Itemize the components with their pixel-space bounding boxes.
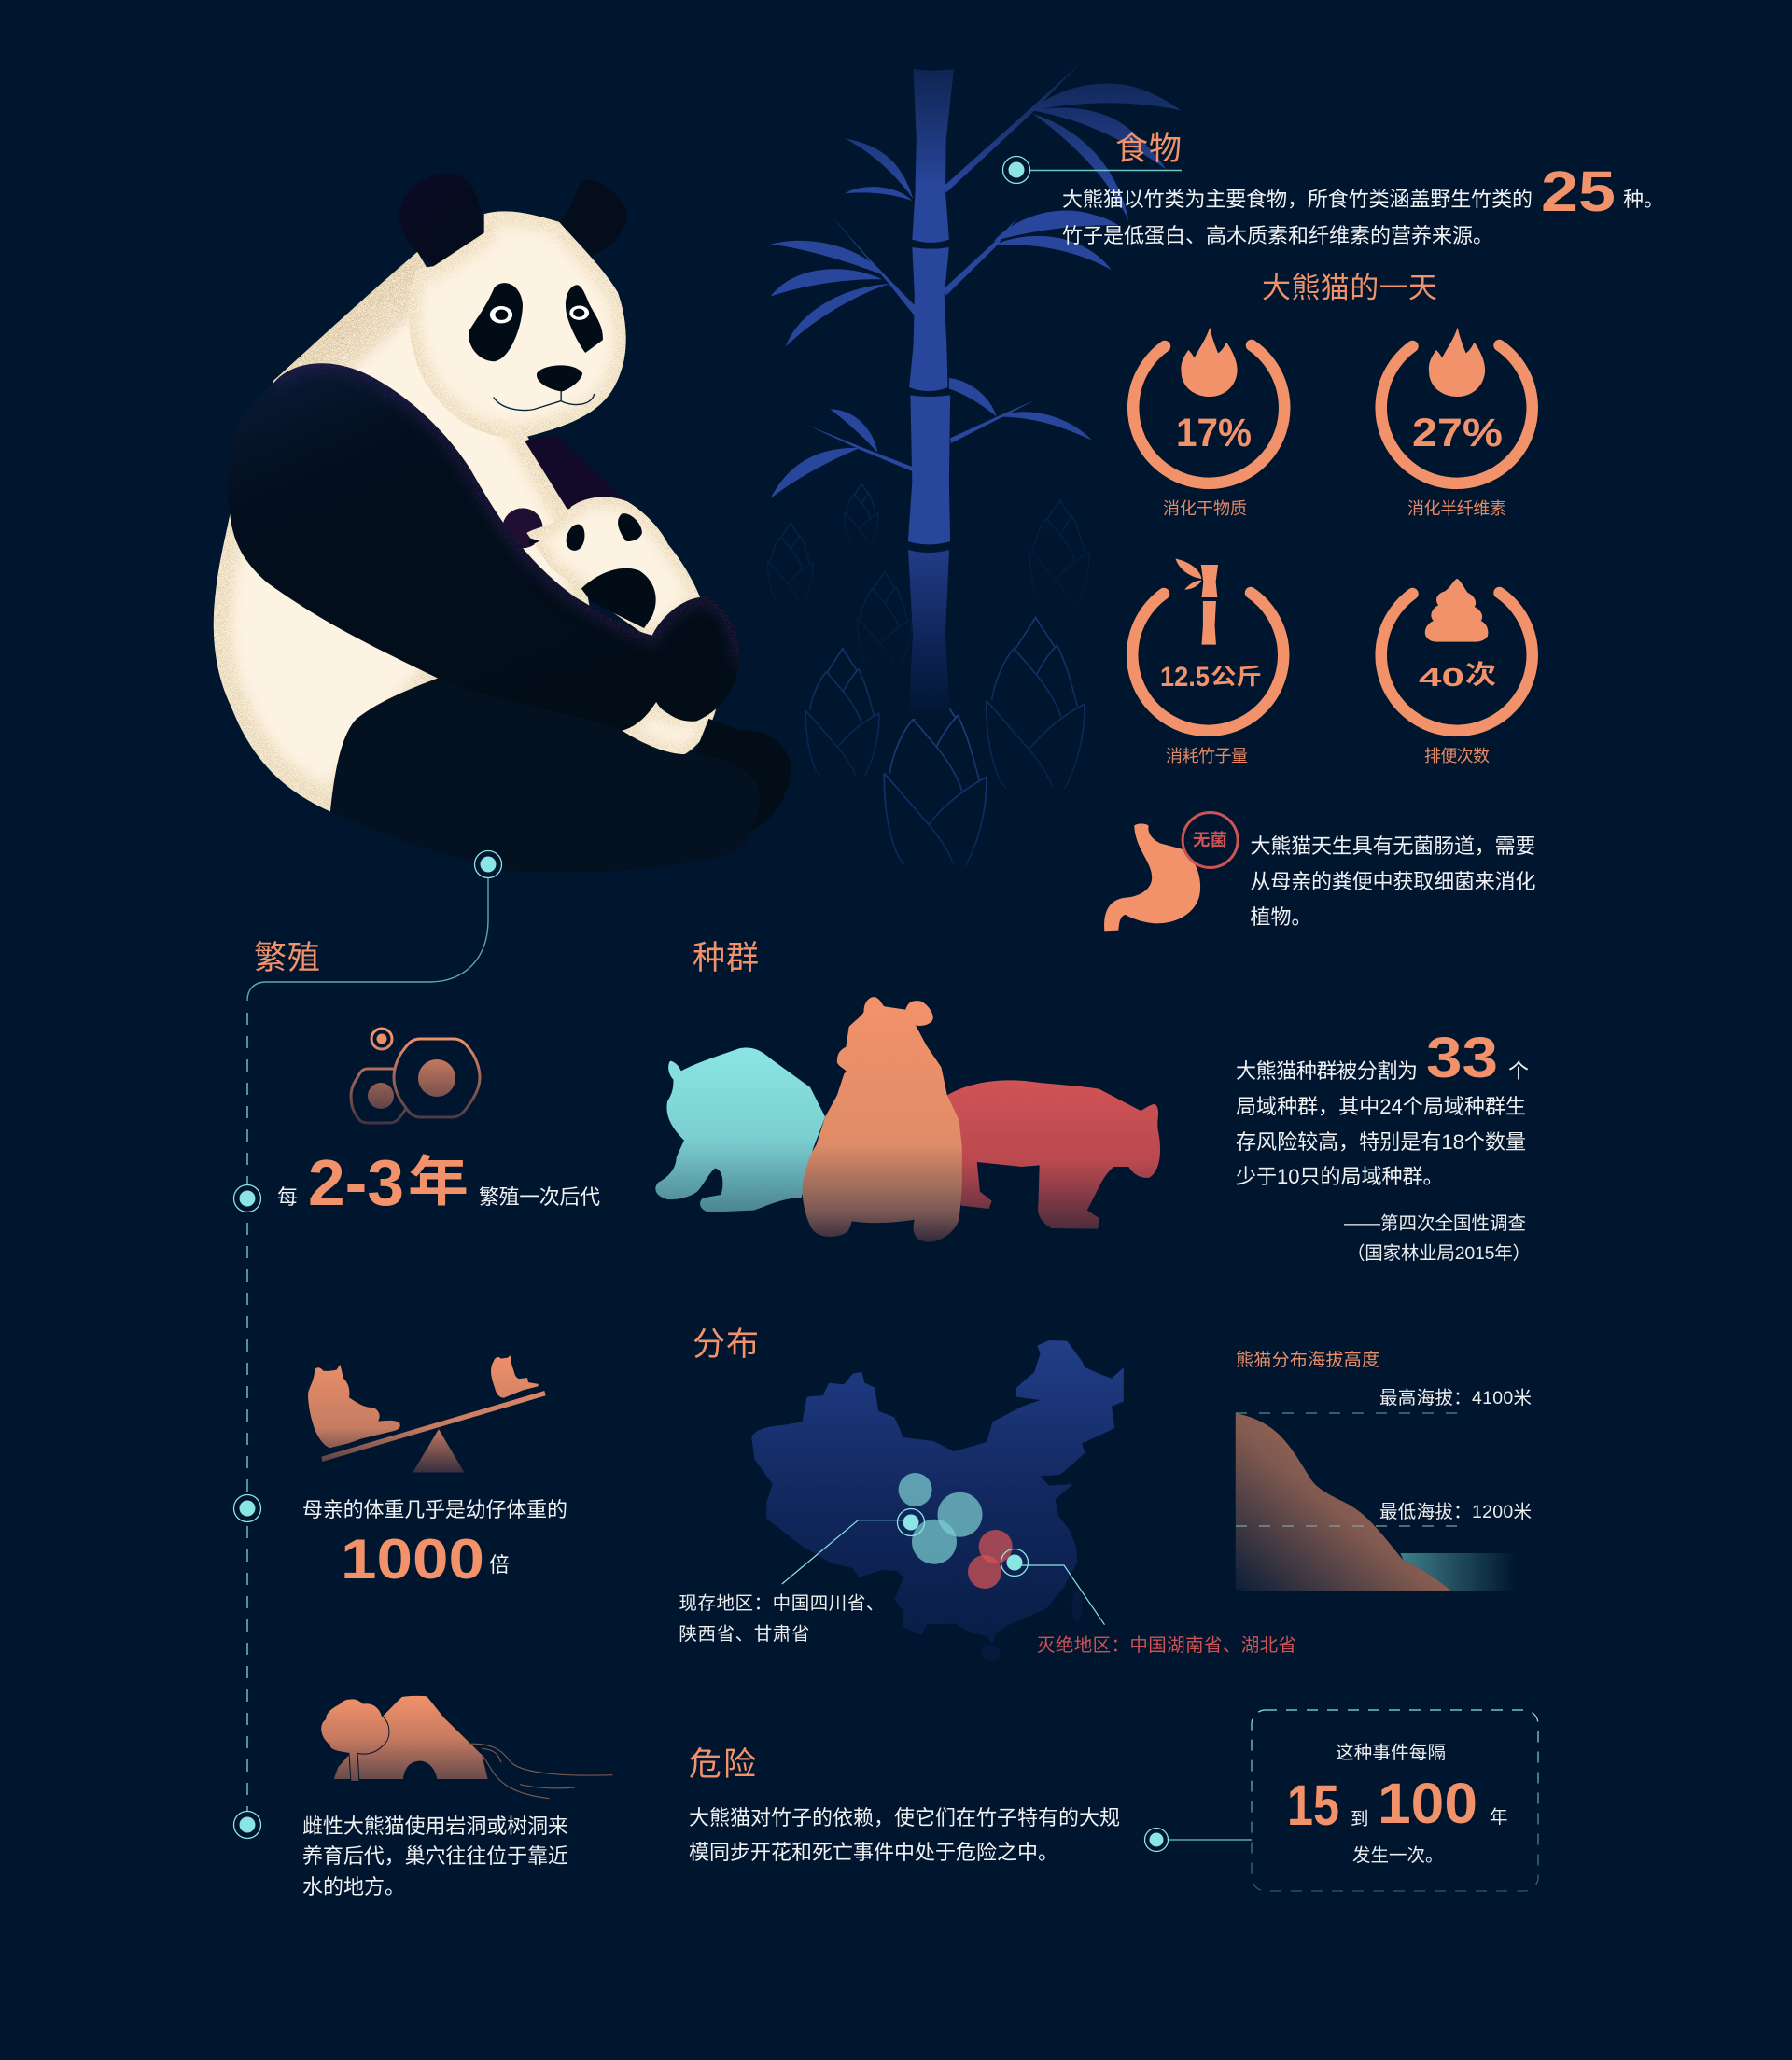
population text: 存风险较高，特别是有18个数量 xyxy=(1236,1130,1526,1154)
danger text: 大熊猫对竹子的依赖，使它们在竹子特有的大规 xyxy=(689,1806,1120,1829)
marker: den xyxy=(233,1811,261,1839)
heading: danger: 危险 xyxy=(689,1746,756,1783)
marker: danger xyxy=(1144,1828,1252,1852)
chart: altitude: 最高海拔：4100米 xyxy=(1379,1388,1532,1408)
fact: breeding interval: 每 xyxy=(277,1185,298,1209)
label: surviving area xyxy=(679,1593,884,1645)
callout: event frequency: 发生一次。 xyxy=(1352,1845,1444,1866)
fact: den xyxy=(302,1815,568,1899)
badge: sterile xyxy=(1183,812,1238,868)
fact: breeding interval: 繁殖一次后代 xyxy=(479,1185,600,1209)
icon: eggs xyxy=(351,1029,480,1123)
stat: dry matter: 17% xyxy=(1176,411,1252,455)
population text: ——第四次全国性调查 xyxy=(1344,1213,1526,1234)
map of China xyxy=(751,1340,1124,1661)
heading: distribution: 分布 xyxy=(693,1326,759,1363)
population text: （国家林业局2015年） xyxy=(1347,1243,1531,1264)
stat: hemicellulose xyxy=(1381,328,1533,518)
callout: event frequency: 到 xyxy=(1351,1809,1369,1829)
callout: event frequency: 这种事件每隔 xyxy=(1336,1743,1446,1763)
icon: stomach xyxy=(1104,823,1200,931)
danger text xyxy=(689,1806,1120,1864)
callout: event frequency xyxy=(1252,1710,1538,1891)
fact: den: 水的地方。 xyxy=(302,1875,405,1899)
food text xyxy=(1062,160,1664,247)
bamboo xyxy=(771,61,1182,719)
marker: extinct area xyxy=(1001,1549,1029,1576)
population text xyxy=(1236,1026,1531,1264)
fact: den: 雌性大熊猫使用岩洞或树洞来 xyxy=(302,1815,568,1838)
stat: dry matter xyxy=(1133,328,1284,518)
population text: 少于10只的局域种群。 xyxy=(1236,1165,1443,1188)
badge: sterile: 无菌 xyxy=(1193,831,1227,849)
heading: reproduction: 繁殖 xyxy=(254,940,320,976)
icon: seesaw xyxy=(308,1355,546,1473)
fact: weight ratio xyxy=(302,1498,567,1591)
stat: defecation: 次 xyxy=(1465,660,1496,689)
fact: weight ratio: 1000 xyxy=(341,1528,484,1591)
label: surviving area: 陕西省、甘肃省 xyxy=(679,1624,809,1645)
stat: defecation: 40 xyxy=(1419,663,1464,692)
population text: 33 xyxy=(1426,1026,1498,1089)
marker: panda xyxy=(474,851,502,877)
callout lines xyxy=(782,1520,1105,1625)
heading: food: 食物 xyxy=(1115,131,1182,167)
population text: 大熊猫种群被分割为 xyxy=(1236,1059,1418,1083)
chart: altitude: 熊猫分布海拔高度 xyxy=(1236,1350,1379,1370)
panda head xyxy=(409,211,626,438)
stat: defecation: 排便次数 xyxy=(1424,747,1490,765)
stomach note xyxy=(1104,812,1536,931)
stomach text: 从母亲的粪便中获取细菌来消化 xyxy=(1251,870,1536,893)
stat: hemicellulose: 消化半纤维素 xyxy=(1407,499,1506,518)
label: extinct area: 灭绝地区：中国湖南省、湖北省 xyxy=(1037,1635,1296,1656)
fact: breeding interval xyxy=(277,1146,600,1219)
panel: distribution xyxy=(679,1326,1532,1661)
danger text: 模同步开花和死亡事件中处于危险之中。 xyxy=(689,1841,1058,1864)
marker: surviving area xyxy=(898,1508,924,1536)
marker: weight xyxy=(233,1495,261,1521)
panda illustration xyxy=(214,173,791,873)
marker: interval xyxy=(233,1185,261,1212)
food section xyxy=(1002,131,1664,247)
timeline connector xyxy=(247,868,488,1815)
fact: breeding interval: 2-3 xyxy=(308,1146,404,1219)
food text: 种。 xyxy=(1623,188,1664,211)
heading: a day of a panda: 大熊猫的一天 xyxy=(1262,272,1437,304)
panel: population xyxy=(655,940,1531,1264)
chart: altitude xyxy=(1236,1350,1532,1591)
population text: 个 xyxy=(1508,1059,1529,1083)
food text: 25 xyxy=(1541,160,1616,223)
marker: food xyxy=(1002,157,1182,183)
callout: event frequency: 15 xyxy=(1287,1773,1339,1837)
heading: population: 种群 xyxy=(693,940,759,976)
stat: bamboo intake: 12.5 xyxy=(1160,662,1210,693)
chart: altitude: 最低海拔：1200米 xyxy=(1379,1502,1532,1522)
stat: bamboo intake: 消耗竹子量 xyxy=(1166,747,1248,765)
panel: danger xyxy=(689,1710,1538,1891)
stat: dry matter: 消化干物质 xyxy=(1163,499,1247,518)
fact: breeding interval: 年 xyxy=(408,1152,469,1212)
stomach text: 植物。 xyxy=(1251,905,1312,929)
chart: bear silhouettes xyxy=(655,997,1160,1242)
bamboo shoots xyxy=(768,483,1089,865)
population text: 局域种群，其中24个局域种群生 xyxy=(1236,1095,1526,1118)
stomach text: 大熊猫天生具有无菌肠道，需要 xyxy=(1251,834,1536,858)
callout: event frequency: 100 xyxy=(1378,1772,1477,1835)
label: surviving area: 现存地区：中国四川省、 xyxy=(679,1593,884,1614)
food text: 大熊猫以竹类为主要食物，所食竹类涵盖野生竹类的 xyxy=(1062,188,1533,211)
stat: defecation xyxy=(1381,579,1533,765)
stat: hemicellulose: 27% xyxy=(1412,411,1503,455)
stat: bamboo intake: 公斤 xyxy=(1211,665,1262,690)
panda cub xyxy=(526,497,701,640)
habitat circles xyxy=(899,1473,1013,1589)
fact: weight ratio: 母亲的体重几乎是幼仔体重的 xyxy=(302,1498,567,1521)
callout: event frequency: 年 xyxy=(1490,1807,1508,1828)
food text: 竹子是低蛋白、高木质素和纤维素的营养来源。 xyxy=(1062,224,1493,247)
fact: weight ratio: 倍 xyxy=(489,1553,510,1577)
icon: cave xyxy=(321,1696,613,1799)
panel: reproduction xyxy=(233,940,613,1899)
stomach text xyxy=(1251,834,1536,929)
fact: den: 养育后代，巢穴往往位于靠近 xyxy=(302,1844,568,1868)
stat: bamboo intake xyxy=(1132,558,1283,765)
